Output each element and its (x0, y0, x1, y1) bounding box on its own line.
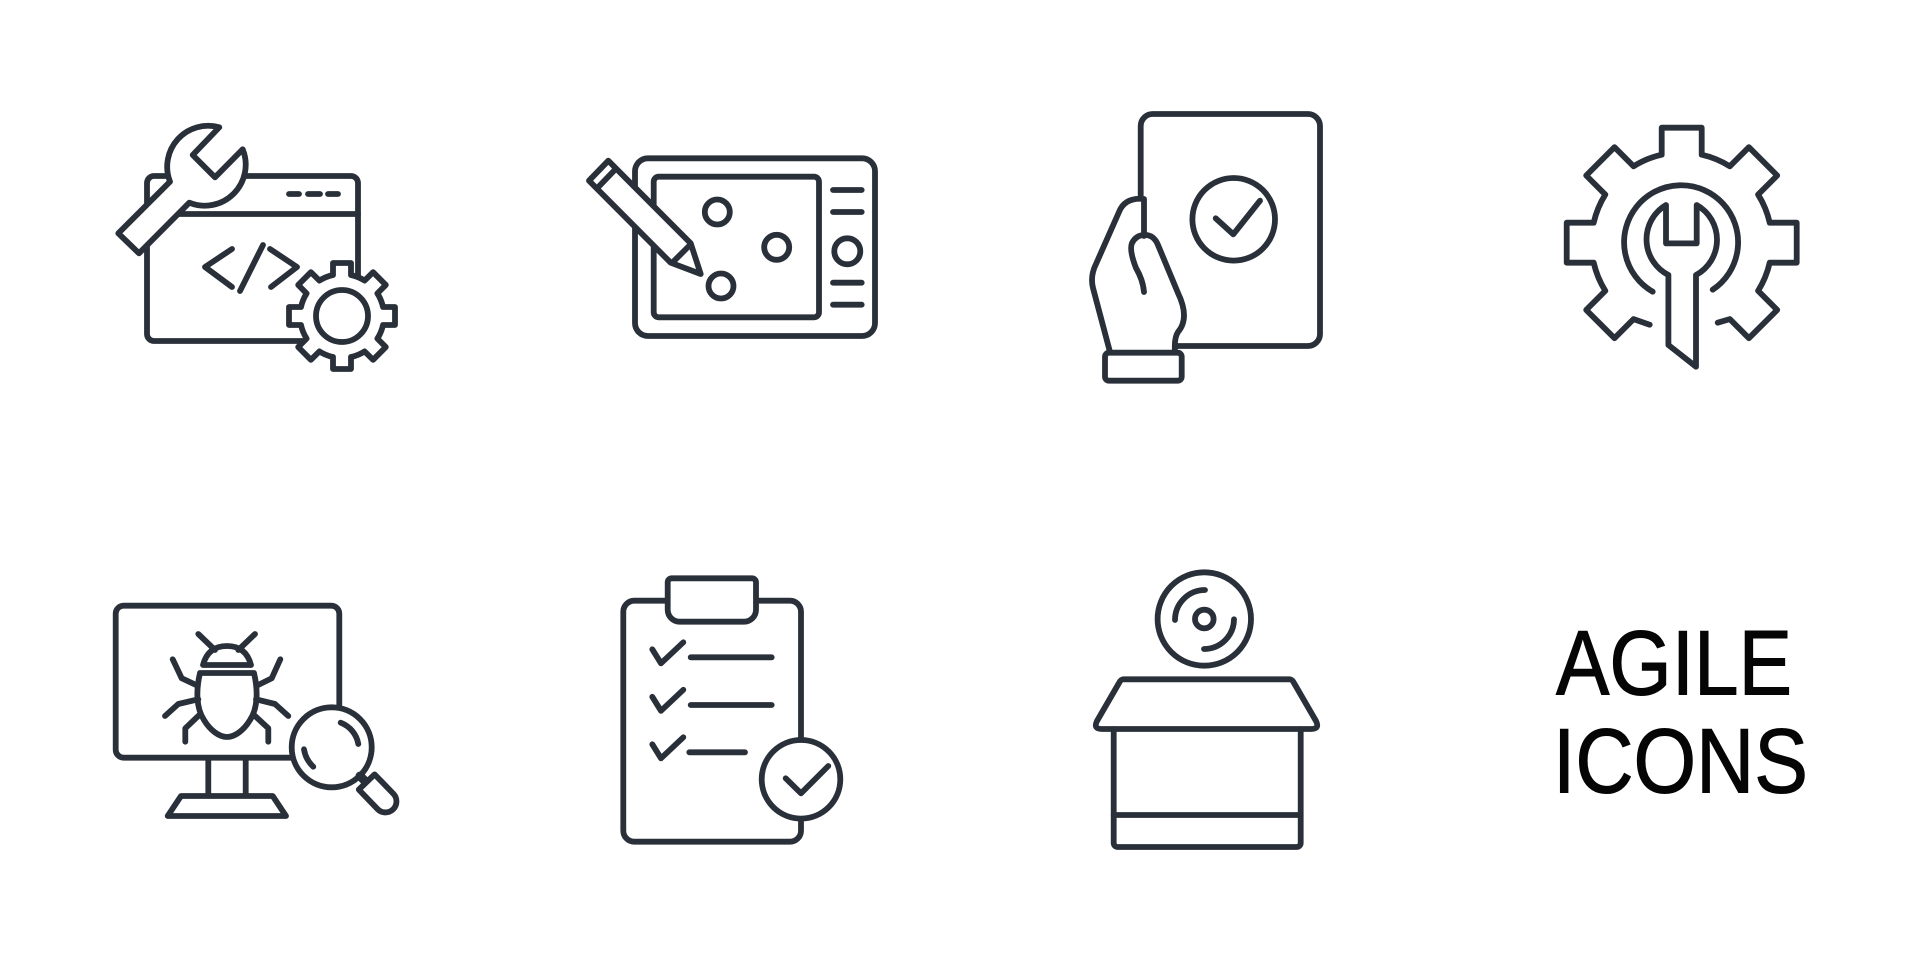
icon: hand holding checked document (1092, 114, 1320, 381)
check marks (652, 642, 683, 758)
icon: gear with wrench (1567, 128, 1797, 367)
list lines (689, 657, 772, 752)
browser window frame (147, 176, 358, 341)
clipboard clip (668, 578, 756, 622)
icon: code window with wrench and gear (118, 126, 395, 369)
magnifier (292, 707, 401, 817)
icon: disc above open box (1096, 572, 1317, 847)
bug (165, 634, 288, 742)
stylus (589, 161, 701, 274)
sleeve cuff (1105, 353, 1182, 381)
tablet drawing area (654, 177, 819, 317)
hand (1092, 199, 1144, 352)
clipboard board (623, 601, 801, 842)
window header dashes (289, 191, 338, 197)
icon: bug on monitor with magnifier (116, 606, 401, 817)
check badge (762, 740, 840, 819)
title text: ICONS (1553, 710, 1808, 812)
tablet body (635, 158, 875, 336)
box lid (1096, 679, 1317, 729)
wrench (118, 126, 246, 253)
drawing points (705, 200, 730, 224)
monitor screen (116, 606, 339, 758)
title text (1553, 612, 1808, 812)
document outline (1141, 114, 1320, 346)
title text: AGILE (1556, 612, 1792, 714)
box body (1114, 729, 1301, 847)
window header line (170, 211, 358, 217)
wrench (1647, 205, 1717, 367)
inner ring arc (1624, 185, 1738, 292)
side buttons (833, 190, 862, 305)
monitor stand (208, 760, 246, 794)
gear (289, 263, 395, 369)
gear outline (1567, 128, 1797, 338)
box stripe (1114, 812, 1301, 818)
icon: graphics tablet with stylus (589, 158, 875, 336)
check badge (1192, 178, 1275, 261)
icon: checklist clipboard (623, 578, 840, 842)
disc (1158, 572, 1251, 666)
code brackets and slash (205, 245, 297, 291)
